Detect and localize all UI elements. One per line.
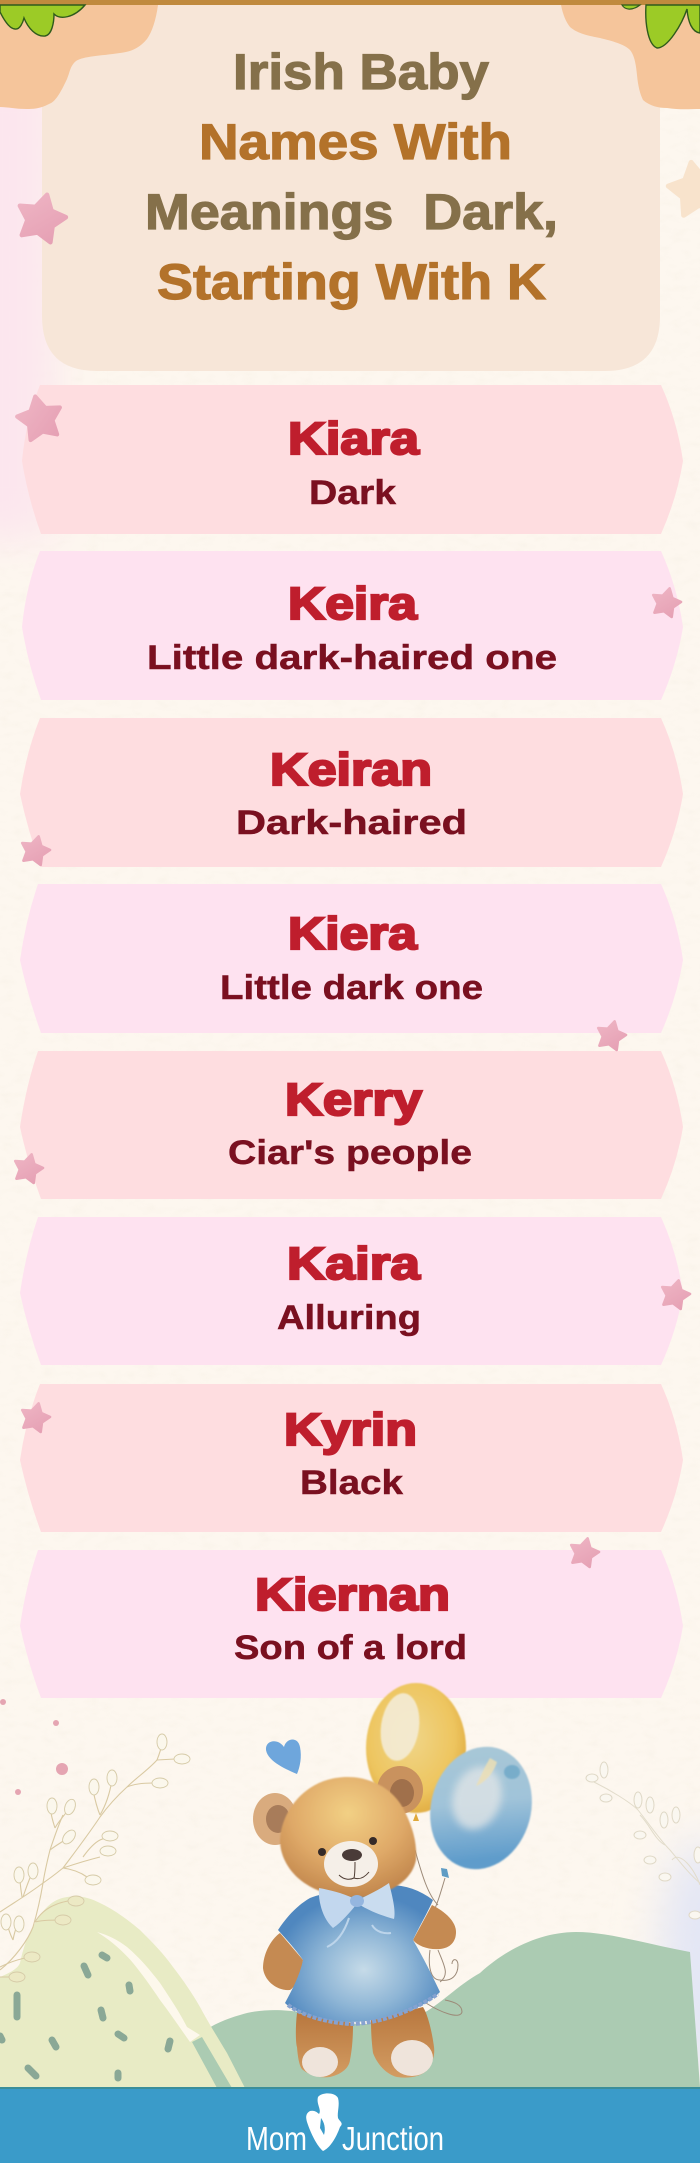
name: Keiran xyxy=(270,744,432,795)
title line 2: Names With xyxy=(199,114,512,170)
pink dots xyxy=(0,1699,68,1795)
star: banner 7 xyxy=(18,1400,52,1433)
star: beige right xyxy=(665,158,700,217)
star: banner 6 xyxy=(658,1277,692,1310)
name: Kerry xyxy=(285,1074,422,1125)
leaves: left xyxy=(0,5,85,36)
name: Kyrin xyxy=(284,1404,417,1455)
head xyxy=(280,1777,416,1897)
logo text: Junction xyxy=(342,2120,444,2157)
banner: Keiran xyxy=(20,718,683,867)
balloon: blue xyxy=(417,1735,545,1881)
logo text xyxy=(246,2120,444,2157)
mouth xyxy=(339,1862,369,1879)
dress xyxy=(278,1885,440,2022)
meaning: Little dark-haired one xyxy=(147,639,557,677)
meaning: Ciar's people xyxy=(228,1134,472,1172)
left arm xyxy=(263,1933,303,1990)
right arm xyxy=(413,1905,456,1949)
hill swoosh xyxy=(97,1932,200,2042)
meaning: Dark xyxy=(309,474,396,512)
banner: Kiernan xyxy=(20,1550,683,1698)
top bar xyxy=(0,0,700,5)
star: banner 5 xyxy=(11,1151,45,1184)
branch: right xyxy=(586,1762,700,1919)
banner: Kerry xyxy=(20,1051,683,1199)
leaves: right xyxy=(646,5,700,48)
star: banner 1 xyxy=(14,392,65,442)
logo silhouette xyxy=(306,2093,342,2151)
muzzle xyxy=(324,1841,378,1887)
star: banner 3 xyxy=(18,833,52,866)
balloon: yellow xyxy=(366,1683,466,1821)
left ear xyxy=(253,1793,297,1845)
banner: Kyrin xyxy=(20,1384,683,1532)
branch: left xyxy=(0,1734,190,1982)
title xyxy=(145,44,558,310)
name: Kiera xyxy=(288,908,418,959)
illustration: teddy bear with balloons xyxy=(253,1683,545,2078)
banner: Keira xyxy=(22,551,683,700)
dress lace xyxy=(288,1994,438,2024)
name: Kiernan xyxy=(255,1569,450,1620)
name: Keira xyxy=(288,578,418,629)
title line 3: Meanings Dark, xyxy=(145,184,558,240)
meaning: Dark-haired xyxy=(236,804,467,842)
meaning: Alluring xyxy=(277,1299,421,1337)
hill: pale xyxy=(0,1896,245,2088)
banner: Kiera xyxy=(20,884,683,1033)
hill dashes xyxy=(0,1955,170,2078)
bow xyxy=(319,1883,395,1928)
feet xyxy=(302,2040,433,2077)
eyes xyxy=(318,1837,377,1856)
right ear xyxy=(377,1766,423,1814)
meaning: Black xyxy=(300,1464,403,1502)
meaning: Little dark one xyxy=(220,969,483,1007)
ribbon lines xyxy=(327,1918,391,1947)
banner: Kiara xyxy=(22,385,683,534)
name: Kiara xyxy=(288,413,420,464)
hills xyxy=(0,1896,700,2088)
nose xyxy=(342,1849,362,1861)
star: banner 2 xyxy=(649,585,683,618)
logo text: Mom xyxy=(246,2120,307,2157)
star: banner 4 xyxy=(594,1018,628,1051)
title line 1: Irish Baby xyxy=(233,44,489,100)
leaf: small right xyxy=(622,5,640,9)
name: Kaira xyxy=(287,1238,421,1289)
hill: green xyxy=(190,1932,700,2088)
title panel xyxy=(0,5,700,371)
meaning: Son of a lord xyxy=(234,1629,467,1667)
legs xyxy=(296,2007,434,2078)
banner: Kaira xyxy=(20,1217,683,1365)
star: banner 8 xyxy=(567,1535,601,1568)
corner blob: left xyxy=(0,5,158,109)
balloon strings xyxy=(415,1850,462,2015)
title line 4: Starting With K xyxy=(157,254,546,310)
heart xyxy=(266,1739,301,1774)
star: top left xyxy=(13,189,70,244)
footer xyxy=(0,2087,700,2163)
corner blob: right xyxy=(561,5,700,109)
